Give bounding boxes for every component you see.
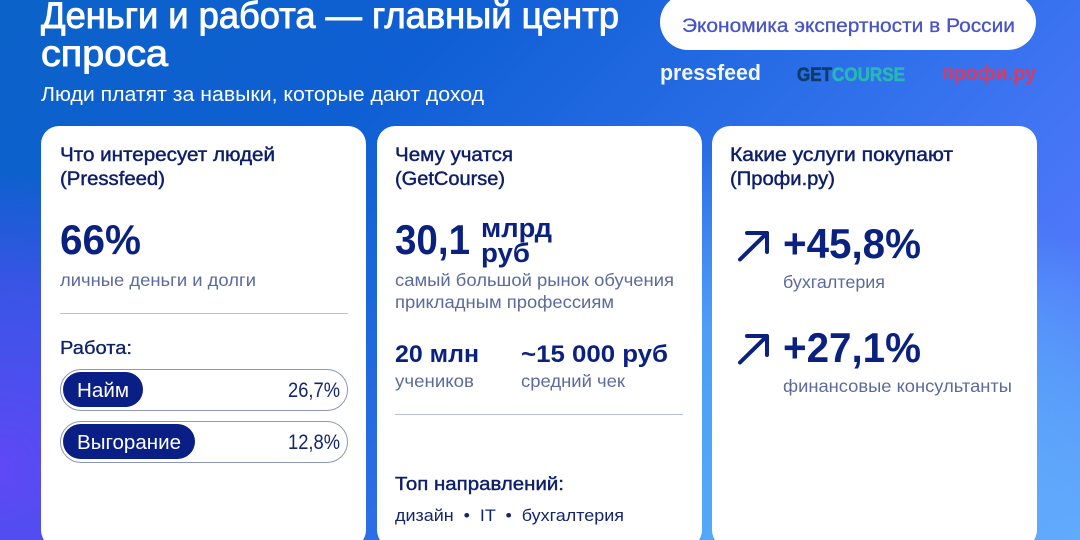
bar: hiring: 26,7% (288, 378, 340, 402)
title (41, 0, 619, 74)
stat caption (395, 270, 674, 312)
panel heading (395, 145, 513, 190)
panel heading: Какие услуги покупают (730, 145, 953, 166)
icon: up arrow (740, 233, 767, 260)
subtitle: Люди платят за навыки, которые дают доход (41, 84, 484, 106)
stat: 30,1 bn rub: 30,1 (395, 216, 470, 263)
title: спроса (41, 33, 168, 74)
stat: 30,1 bn rub: руб (481, 238, 530, 268)
stat: students: 20 млн (395, 341, 479, 368)
bar: hiring: Найм (77, 380, 129, 402)
work label: Работа: (60, 337, 132, 358)
logo: GetCourse: COURSE (832, 65, 905, 86)
stat: students (395, 341, 479, 391)
panel: services bought (712, 126, 1037, 540)
logo: pressfeed: pressfeed (660, 60, 761, 85)
panel heading (730, 145, 953, 190)
stat: accounting: бухгалтерия (783, 272, 885, 292)
stat: financial consultants (783, 324, 1012, 396)
stat: average check: ~15 000 руб (521, 341, 668, 368)
stat: financial consultants: +27,1% (783, 324, 921, 371)
panel heading: (GetCourse) (395, 169, 505, 190)
stat caption: личные деньги и долги (60, 270, 256, 290)
stat: accounting: +45,8% (783, 220, 921, 267)
panel heading: Что интересует людей (60, 145, 275, 166)
top directions: Топ направлений: (395, 473, 564, 494)
top directions (395, 473, 624, 525)
stat: accounting (783, 220, 921, 292)
stat: 30,1 bn rub: млрд (481, 213, 552, 243)
panel heading: (Pressfeed) (60, 169, 165, 190)
stat: financial consultants: финансовые консультанты (783, 376, 1012, 396)
bar: burnout: Выгорание (77, 432, 181, 454)
panel heading (60, 145, 275, 190)
panel: what interests people (41, 126, 366, 540)
badge: report name (660, 0, 1036, 50)
bar: burnout: 12,8% (288, 430, 340, 454)
bar: hiring (60, 370, 348, 410)
stat: average check: средний чек (521, 371, 625, 391)
stat: 66%: 66% (60, 216, 141, 263)
panel heading: Чему учатся (395, 145, 513, 166)
panel heading: (Профи.ру) (730, 169, 835, 190)
bar: burnout (60, 422, 348, 462)
stat caption: самый большой рынок обучения (395, 270, 674, 290)
logo: GetCourse (797, 65, 905, 86)
stat: 30,1 bn rub (395, 213, 552, 268)
panel: what people study (377, 126, 702, 540)
logo: GetCourse: GET (797, 65, 832, 86)
badge: report name: Экономика экспертности в России (682, 16, 1015, 37)
stat: students: учеников (395, 371, 474, 391)
icon: up arrow (740, 336, 767, 362)
top directions: дизайн • IT • бухгалтерия (395, 506, 624, 525)
stat: average check (521, 341, 668, 391)
stat caption: прикладным профессиям (395, 292, 614, 312)
logo: profi.ru: профи.ру (942, 62, 1036, 85)
